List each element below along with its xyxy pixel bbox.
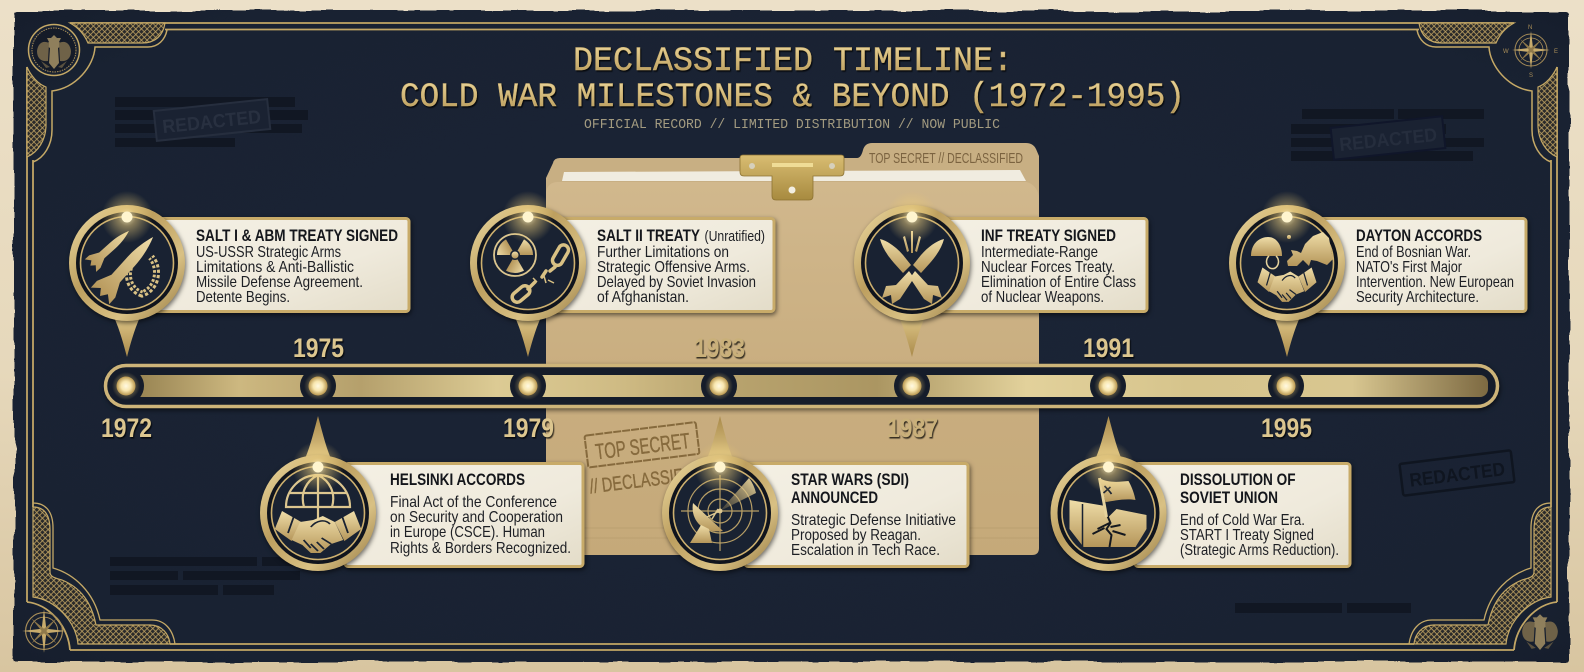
year labels: 1995 (1261, 413, 1312, 443)
timeline node: 1975 (300, 368, 336, 404)
pin medallion (69, 191, 185, 357)
milestone: Helsinki Accords (260, 416, 583, 571)
redacted block: top left (115, 97, 308, 147)
info card: Detente Begins. (196, 289, 290, 306)
folder stamp: top secret (583, 421, 708, 498)
icon: radar dish and sweep (681, 475, 759, 551)
year labels: 1983 (694, 333, 745, 363)
corner compass: top right: S (1529, 73, 1533, 79)
info card: Final Act of the Conference (390, 494, 557, 511)
timeline node: 1972 (108, 368, 144, 404)
corner compass: bottom left (22, 609, 66, 653)
info card: End of Cold War Era. (1180, 512, 1305, 529)
info card: Elimination of Entire Class (981, 274, 1136, 291)
info card: DISSOLUTION OF (1180, 470, 1296, 489)
info card: ANNOUNCED (791, 488, 878, 507)
info card: Strategic Defense Initiative (791, 512, 956, 529)
timeline node: 1979 (510, 368, 546, 404)
icon: radiation and broken chain (492, 234, 570, 304)
info card (745, 464, 968, 566)
icon: helmet, Europe and handshake (1251, 232, 1333, 302)
info card (345, 464, 583, 566)
corner compass: top right: N (1528, 25, 1532, 31)
redacted block: bottom left (110, 557, 330, 595)
pin medallion (662, 416, 778, 571)
info card: SALT II TREATY (597, 226, 701, 245)
info card: Limitations & Anti-Ballistic (196, 259, 354, 276)
redacted block: bottom right (1235, 603, 1411, 613)
redacted block: top right: REDACTED (1338, 125, 1438, 156)
info card: HELSINKI ACCORDS (390, 470, 525, 489)
info card: STAR WARS (SDI) (791, 470, 909, 489)
folder stamp: top secret: // DECLASSIFIED (588, 462, 708, 498)
year labels: 1972 (101, 413, 152, 443)
timeline node: 1983 (701, 368, 737, 404)
info card: Delayed by Soviet Invasion (597, 274, 756, 291)
subtitle: OFFICIAL RECORD // LIMITED DISTRIBUTION // NOW PUBLIC (584, 118, 1000, 133)
pin medallion (260, 416, 376, 571)
pin medallion (854, 191, 970, 357)
year labels: 1975 (293, 333, 344, 363)
info card: Missile Defense Agreement. (196, 274, 363, 291)
year labels: 1987 (887, 413, 938, 443)
pin medallion (1050, 416, 1166, 571)
info card: on Security and Cooperation (390, 509, 563, 526)
info card: SOVIET UNION (1180, 488, 1278, 507)
pin medallion (1229, 191, 1345, 357)
info card (1310, 218, 1526, 312)
icon: crumbling wall with Soviet flag (1070, 478, 1146, 547)
info card: SALT I & ABM TREATY SIGNED (196, 226, 398, 245)
redacted stamp: bottom right (1399, 450, 1515, 496)
corner compass: top right (1503, 25, 1558, 79)
pin medallion (470, 191, 586, 357)
info card: DAYTON ACCORDS (1356, 226, 1482, 245)
info card: Intermediate-Range (981, 244, 1098, 261)
info card: Security Architecture. (1356, 289, 1479, 306)
milestone: Dayton Accords (1229, 191, 1526, 357)
redacted block: top left: REDACTED (161, 107, 262, 138)
folder illustration (546, 143, 1039, 555)
corner compass: top right: W (1503, 49, 1509, 55)
folder stamp: top secret: TOP SECRET (594, 428, 691, 464)
info card: Strategic Offensive Arms. (597, 259, 750, 276)
redacted stamp: bottom right: REDACTED (1408, 459, 1506, 492)
milestone: Dissolution of Soviet Union (1050, 416, 1350, 571)
year labels: 1991 (1083, 333, 1134, 363)
info card: Escalation in Tech Race. (791, 542, 940, 559)
info card: (Unratified) (704, 229, 765, 245)
info card (150, 218, 409, 312)
title: COLD WAR MILESTONES & BEYOND (1972-1995) (400, 79, 1185, 117)
corner seal: bottom right (1522, 614, 1558, 650)
info card (935, 218, 1147, 312)
timeline node: 1991 (1090, 368, 1126, 404)
milestone: SALT II Treaty (470, 191, 774, 357)
icon: crossed broken missiles (880, 231, 944, 304)
info card: NATO's First Major (1356, 259, 1462, 276)
info card: of Nuclear Weapons. (981, 289, 1104, 306)
info card: (Strategic Arms Reduction). (1180, 542, 1339, 559)
corner seal: top left (28, 24, 80, 76)
year labels (101, 333, 1312, 443)
timeline node: 1987 (894, 368, 930, 404)
info card: US-USSR Strategic Arms (196, 244, 341, 261)
info card: Further Limitations on (597, 244, 729, 261)
timeline bar (106, 366, 1498, 406)
milestone: SALT I and ABM Treaty (69, 191, 409, 357)
info card (1135, 464, 1350, 566)
timeline node: 1995 (1268, 368, 1304, 404)
year labels: 1979 (503, 413, 554, 443)
info card: Intervention. New European (1356, 274, 1514, 291)
info card: Nuclear Forces Treaty. (981, 259, 1115, 276)
info card: End of Bosnian War. (1356, 244, 1471, 261)
info card: in Europe (CSCE). Human (390, 524, 545, 541)
info card: INF TREATY SIGNED (981, 226, 1116, 245)
folder metal clip (740, 155, 844, 200)
title (400, 43, 1185, 117)
milestone: INF Treaty (854, 191, 1147, 357)
folder tab label: TOP SECRET // DECLASSIFIED (869, 150, 1023, 167)
title: DECLASSIFIED TIMELINE: (573, 43, 1013, 81)
icon: globe and handshake (275, 475, 361, 553)
icon: missiles and wreath (85, 225, 162, 304)
info card: of Afghanistan. (597, 289, 689, 306)
info card: Proposed by Reagan. (791, 527, 921, 544)
info card (550, 218, 774, 312)
info card: Rights & Borders Recognized. (390, 540, 571, 557)
milestone: Star Wars SDI (662, 416, 968, 571)
redacted block: top right (1291, 109, 1484, 161)
corner compass: top right: E (1554, 49, 1558, 55)
info card: START I Treaty Signed (1180, 527, 1314, 544)
